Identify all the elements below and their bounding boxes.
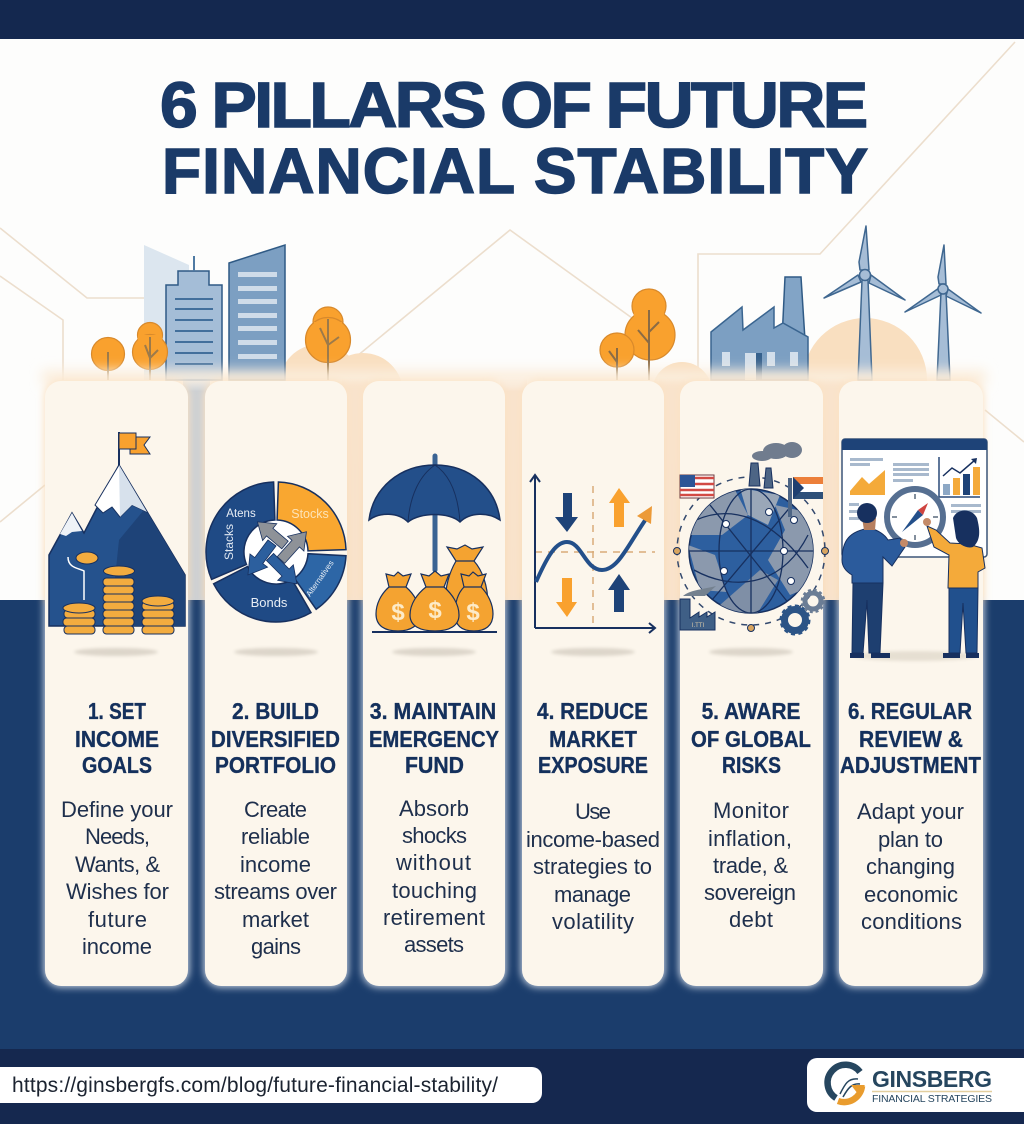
body text: without (395, 850, 471, 875)
heading: 5. AWARE (702, 698, 800, 724)
body text: shocks (402, 823, 467, 848)
body text: Use (575, 799, 611, 824)
body text: manage (554, 882, 631, 907)
heading: 3. MAINTAIN (370, 698, 496, 724)
logo: Ginsberg Financial Strategies: FINANCIAL STRATEGIES (872, 1093, 992, 1105)
icon: portfolio pie: Stocks (291, 507, 329, 521)
dashboard (842, 439, 987, 557)
body text (383, 796, 485, 957)
icon: umbrella and money bags: $ (428, 597, 442, 624)
heading (211, 698, 340, 778)
heading (840, 698, 982, 778)
heading: 4. REDUCE (537, 698, 648, 724)
icon: portfolio pie: Atens (226, 508, 256, 520)
body text (526, 799, 660, 934)
body text: market (242, 907, 309, 932)
icon: mountain with flag and coins (49, 432, 185, 656)
body text (704, 798, 796, 932)
icon: umbrella and money bags: $ (466, 599, 480, 626)
logo: Ginsberg Financial Strategies (807, 1058, 1024, 1112)
body text: inflation, (708, 826, 792, 851)
panel: card 2 (205, 381, 347, 986)
heading: EXPOSURE (538, 753, 648, 778)
body text: Monitor (713, 798, 789, 823)
body text: income (240, 852, 311, 877)
title (160, 69, 868, 207)
wind turbines (824, 226, 981, 380)
body text: conditions (861, 909, 962, 934)
heading: GOALS (82, 753, 152, 778)
trees left (92, 307, 350, 380)
heading: EMERGENCY (369, 726, 500, 752)
body text (214, 797, 337, 959)
logo: Ginsberg Financial Strategies: GINSBERG (872, 1066, 992, 1092)
panel: card 5 (674, 381, 828, 986)
heading: 1. SET (88, 699, 146, 724)
panel: card 1 (45, 381, 188, 986)
body text: Absorb (399, 796, 469, 821)
heading: DIVERSIFIED (211, 726, 340, 752)
body text: income (82, 934, 152, 959)
body text: future (88, 907, 147, 932)
body text: changing (866, 854, 955, 879)
icon: umbrella and money bags (369, 456, 500, 656)
body text (61, 797, 173, 959)
heading: MARKET (549, 726, 638, 752)
body text: economic (864, 882, 958, 907)
icon: G mark (828, 1065, 865, 1102)
peach sun circles (279, 318, 927, 442)
background circuit lines (0, 42, 1024, 522)
compass (887, 489, 943, 545)
icon: portfolio pie: Stacks (222, 524, 236, 560)
heading: OF GLOBAL (691, 726, 811, 752)
body text: trade, & (713, 853, 788, 878)
body text: streams over (214, 879, 337, 904)
factory (711, 277, 808, 380)
heading (369, 698, 500, 778)
heading: FUND (405, 752, 464, 778)
title: FINANCIAL STABILITY (162, 135, 868, 207)
body text: sovereign (704, 880, 796, 905)
title: 6 PILLARS OF FUTURE (160, 69, 868, 141)
icon: portfolio pie (206, 482, 346, 656)
icon: volatility chart with arrows (530, 475, 655, 656)
heading (537, 698, 648, 778)
heading: 2. BUILD (232, 698, 319, 724)
icon: portfolio pie: Bonds (251, 595, 288, 610)
body text: Needs, (85, 824, 150, 849)
heading: INCOME (75, 726, 159, 752)
heading (691, 698, 811, 778)
icon: people reviewing dashboard with compass (842, 439, 987, 661)
icon: portfolio pie: Alternatives (304, 559, 336, 598)
heading: ADJUSTMENT (840, 752, 982, 778)
body text: volatility (552, 909, 634, 934)
body text: Create (244, 797, 307, 822)
panel: card 3 (363, 381, 505, 986)
body text: debt (729, 907, 773, 932)
gaps behind cards (183, 378, 844, 600)
body text: strategies to (533, 854, 652, 879)
body text: Define your (61, 797, 173, 822)
body text: income-based (526, 827, 660, 852)
body text: assets (404, 932, 464, 957)
trees right (600, 289, 675, 380)
body text: Wishes for (66, 879, 169, 904)
body text: Adapt your (857, 799, 964, 824)
heading (75, 699, 159, 778)
body text: plan to (878, 827, 943, 852)
body text (857, 799, 964, 934)
url bar: https://ginsbergfs.com/blog/future-financial-stability/ (12, 1074, 498, 1097)
icon: US flag (680, 475, 714, 498)
body text: touching (392, 878, 477, 903)
man (842, 503, 908, 658)
icon: globe with flags and industry: I.TTI (692, 623, 704, 629)
body text: reliable (241, 824, 310, 849)
skyline left: buildings (144, 245, 285, 380)
icon: umbrella and money bags: $ (391, 599, 405, 626)
body text: Wants, & (75, 852, 160, 877)
heading: PORTFOLIO (215, 752, 336, 778)
heading: RISKS (722, 753, 781, 778)
haze at skyline base (42, 370, 986, 386)
icon: striped flag (790, 477, 823, 517)
url bar (0, 1067, 542, 1103)
body text: retirement (383, 905, 485, 930)
panel: card 4 (522, 381, 664, 986)
heading: REVIEW & (859, 726, 963, 752)
panel: card 6 (839, 381, 987, 986)
body text: gains (251, 934, 301, 959)
woman (923, 510, 985, 658)
icon: globe with flags and industry (674, 442, 828, 656)
heading: 6. REGULAR (848, 698, 972, 724)
card glows (44, 380, 984, 987)
